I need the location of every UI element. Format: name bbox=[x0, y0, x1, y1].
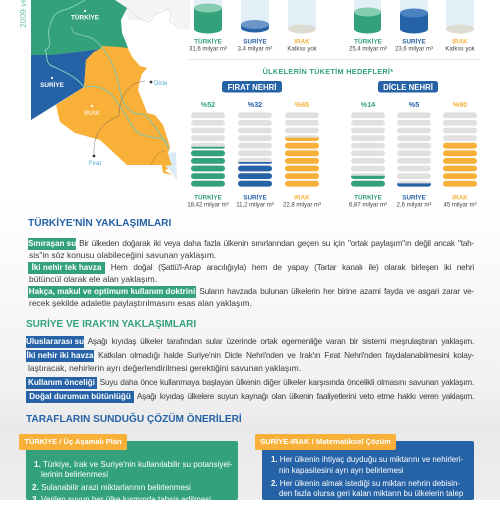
panel: Syria-Iraq solution bbox=[262, 441, 474, 500]
Turkey plan text bbox=[32, 460, 232, 504]
cylinder Iraq Euphrates bbox=[288, 24, 316, 34]
percentages: %52 bbox=[201, 100, 215, 109]
values bbox=[187, 46, 477, 208]
Turkey plan text: 2. Sulanabilir arazi miktarlarının belirlenmesi bbox=[32, 483, 191, 492]
Syria and Iraq approaches text: Doğal durumun bütünlüğü bbox=[29, 392, 131, 401]
consumption heading: ÜLKELERİN TÜKETİM HEDEFLERİ* bbox=[263, 67, 393, 76]
values: 25,4 milyar m³ bbox=[349, 46, 387, 52]
Syria and Iraq approaches text: Kullanım önceliği bbox=[28, 378, 95, 387]
Syria and Iraq approaches text: İki nehir iki havza bbox=[26, 351, 94, 360]
tab: Turkey plan bbox=[19, 434, 127, 450]
Syria and Iraq approaches text: Aşağı kıyıdaş ülkelere suyun kaynağı olan ülkenin faaliyetlerini veto etme hakkı veren yaklaşım. bbox=[137, 391, 474, 401]
heading: Turkey approaches: TÜRKİYE'NİN YAKLAŞIMLARI bbox=[28, 218, 171, 229]
percentages: %5 bbox=[409, 100, 419, 109]
map of the basin bbox=[31, 0, 190, 181]
Syria and Iraq approaches text: Aşağı kıyıdaş ülkeler tarafından sular üzerinde ortak egemenliğe varan bir sistemi meşrulaştıran yaklaşım. bbox=[88, 336, 474, 346]
Turkey approaches text: Hem doğal (Şattü'l-Arap aracılığıyla) hem de yapay (Tartar kanalı ile) olarak birleşen iki nehri bbox=[111, 262, 474, 272]
Turkey plan text: 3. Verilen suyun her ülke kısmında tahsis edilmesi bbox=[32, 495, 211, 504]
cylinder labels: SURİYE bbox=[243, 193, 267, 201]
Turkey plan text: 1. Türkiye, Irak ve Suriye'nin kullanılabilir su potansiyel- bbox=[34, 460, 232, 469]
map of the basin: Dicle bbox=[154, 81, 168, 87]
charts and map bbox=[31, 0, 480, 208]
cylinder labels: IRAK bbox=[452, 38, 468, 45]
cylinder labels: SURİYE bbox=[402, 37, 426, 45]
panel: Turkey plan bbox=[26, 441, 238, 500]
map of the basin: IRAK bbox=[84, 110, 100, 117]
percentages bbox=[201, 100, 467, 109]
values: 3,4 milyar m³ bbox=[238, 46, 272, 52]
map of the basin: TÜRKİYE bbox=[71, 12, 100, 22]
Turkey approaches text: İki nehir tek havza bbox=[32, 263, 101, 272]
cylinder Turkey Euphrates bbox=[194, 4, 222, 34]
percentages: %32 bbox=[248, 100, 262, 109]
tab: Turkey plan: TÜRKİYE / Üç Aşamalı Plan bbox=[24, 437, 122, 446]
tab: Syria-Iraq solution: SURİYE-IRAK / Matematiksel Çözüm bbox=[260, 437, 391, 446]
map of the basin: SURİYE bbox=[40, 80, 65, 89]
cylinder labels: TÜRKİYE bbox=[194, 36, 222, 45]
values: 6,87 milyar m³ bbox=[349, 202, 387, 208]
values: 18,42 milyar m³ bbox=[187, 202, 229, 208]
Syria and Iraq approaches text: Suyu daha önce kullanmaya başlayan ülkenin diğer ülkeler karşısında öncelikli olmasını savunan yaklaşım. bbox=[100, 377, 474, 387]
values: Katkısı yok bbox=[287, 46, 318, 52]
Turkey approaches text: Sınıraşan su bbox=[28, 239, 76, 248]
Turkey approaches text: sis"in söz konusu olabileceğini savunan yaklaşım. bbox=[29, 250, 216, 260]
percentages: %14 bbox=[361, 100, 375, 109]
Turkey approaches text: bütüncül olarak ele alan yaklaşım. bbox=[29, 274, 157, 284]
Syria and Iraq approaches text: Uluslararası su bbox=[26, 337, 84, 346]
cylinder labels: TÜRKİYE bbox=[354, 36, 382, 45]
Turkey approaches text: recek şekilde adaletle paylaştırılmasını esas alan yaklaşım. bbox=[29, 298, 252, 308]
values: 2,6 milyar m³ bbox=[397, 202, 431, 208]
values: 31,6 milyar m³ bbox=[189, 46, 227, 52]
Syria and Iraq approaches text: laştıracak, nehirlerin ayrı değerlendirilmesi gerektiğini savunan yaklaşım. bbox=[28, 363, 301, 373]
Syria and Iraq approaches text bbox=[26, 336, 474, 403]
values: 22,8 milyar m³ bbox=[283, 202, 321, 208]
percentages: %90 bbox=[453, 100, 467, 109]
Syria-Iraq solution text bbox=[271, 455, 463, 498]
cylinder labels: SURİYE bbox=[243, 37, 267, 45]
pill Euphrates bbox=[222, 81, 282, 92]
heading: solutions: TARAFLARIN SUNDUĞU ÇÖZÜM ÖNERİLERİ bbox=[26, 414, 242, 425]
values: Katkısı yok bbox=[445, 46, 476, 52]
cylinder Syria Tigris bbox=[400, 8, 428, 34]
percentages: %65 bbox=[295, 100, 309, 109]
Turkey approaches text: Suların havzada bulunan ülkelerin her birine azami fayda ve asgari zarar ve- bbox=[199, 286, 474, 296]
values: 23,6 milyar m³ bbox=[395, 46, 433, 52]
Turkey approaches text: Bir ülkeden doğarak iki veya daha fazla ülkenin sınırlarından geçen su için "ortak paylaşım"ın değil ancak "tah- bbox=[79, 238, 474, 248]
cylinder Turkey Tigris bbox=[354, 8, 381, 34]
cylinder Syria Euphrates bbox=[241, 20, 269, 32]
stacked bars bbox=[191, 112, 477, 187]
cylinder labels: IRAK bbox=[294, 38, 310, 45]
cylinder Iraq Tigris bbox=[446, 24, 474, 34]
pill Euphrates: FIRAT NEHRİ bbox=[228, 83, 276, 92]
Turkey approaches text: Hakça, makul ve optimum kullanım doktrini bbox=[29, 287, 195, 296]
Syria-Iraq solution text: 1. Her ülkenin ihtiyaç duyduğu su miktarını ve nehirleri- bbox=[271, 455, 463, 464]
cylinder labels: SURİYE bbox=[402, 193, 426, 201]
pill Tigris: DİCLE NEHRİ bbox=[383, 83, 433, 92]
Syria-Iraq solution text: 2. Her ülkenin almak istediği su miktarı nehrin debisin- bbox=[271, 479, 460, 488]
cylinder labels: IRAK bbox=[294, 194, 310, 201]
heading: Syria and Iraq approaches: SURİYE VE IRAK'IN YAKLAŞIMLARI bbox=[26, 319, 196, 330]
cylinder charts bbox=[194, 0, 474, 34]
Syria-Iraq solution text: nin kapasitesini ayrı ayrı belirlemesi bbox=[279, 466, 404, 475]
cylinder labels: TÜRKİYE bbox=[354, 192, 382, 201]
Turkey plan text: lerinin belirlenmesi bbox=[41, 470, 108, 479]
tab: Syria-Iraq solution bbox=[255, 434, 396, 450]
pill Tigris bbox=[378, 81, 438, 92]
cylinder labels: TÜRKİYE bbox=[194, 192, 222, 201]
cylinder labels: IRAK bbox=[452, 194, 468, 201]
Syria and Iraq approaches text: Katkılan olmadığı halde Suriye'nin Dicle Nehri'nden ve Irak'ın Fırat Nehri'nden faydalanabilmesini kolay- bbox=[98, 350, 474, 360]
cylinder labels bbox=[194, 36, 468, 201]
values: 11,2 milyar m³ bbox=[236, 202, 274, 208]
Turkey approaches text bbox=[28, 238, 474, 308]
map of the basin: Fırat bbox=[89, 161, 101, 167]
Syria-Iraq solution text: den fazla olursa geri kalan miktarın bu ülkelerin talep bbox=[279, 489, 463, 498]
values: 45 milyar m³ bbox=[443, 202, 477, 208]
